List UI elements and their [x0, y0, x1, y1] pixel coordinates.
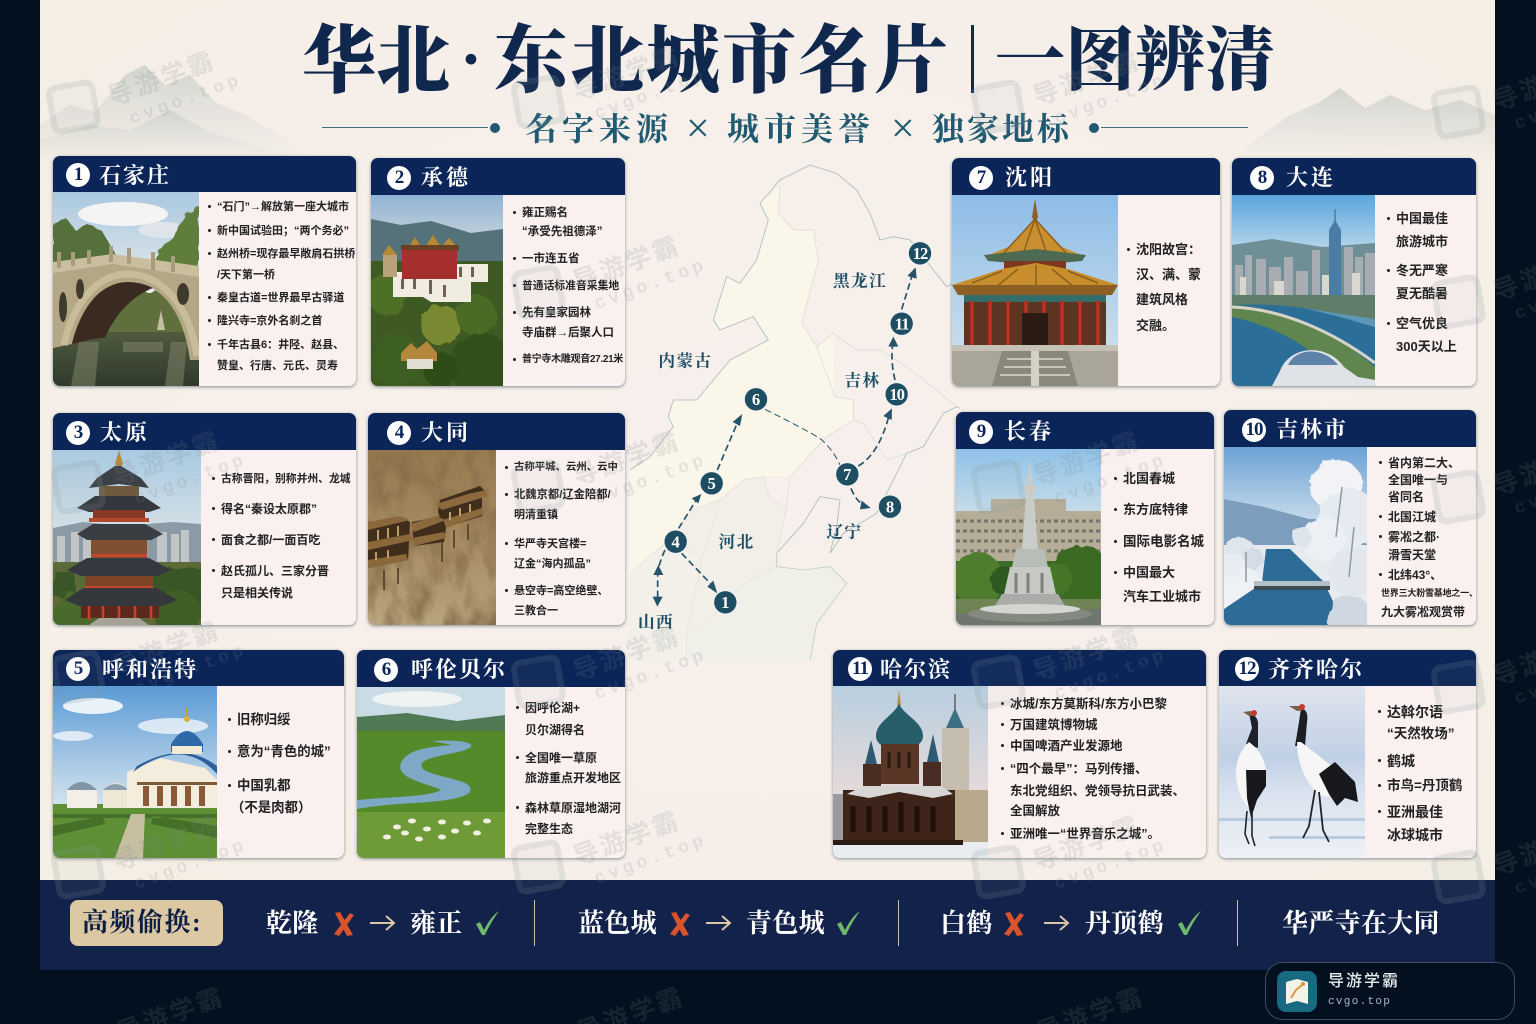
province labels	[638, 272, 887, 632]
province labels: 内蒙古	[658, 351, 712, 371]
text block: 全国解放	[1010, 804, 1060, 818]
high-frequency swap badge	[70, 900, 223, 946]
heading: 哈尔滨	[880, 656, 952, 682]
heading: 2	[395, 166, 403, 188]
text block: 亚洲最佳	[1387, 804, 1443, 820]
card 12: 齐齐哈尔	[1219, 650, 1476, 858]
subtitle: ×	[891, 106, 915, 152]
route nodes: 1	[721, 593, 729, 612]
text block: 旅游重点开发地区	[525, 771, 621, 785]
text block: 旧称归绥	[237, 712, 291, 727]
heading: 7	[977, 166, 985, 188]
province labels: 辽宁	[826, 522, 862, 541]
heading: 吉林市	[1276, 417, 1348, 442]
card 3: 太原	[53, 413, 356, 625]
watermark layer: cvgo.top	[592, 830, 710, 890]
text block: 中国最大	[1123, 565, 1175, 580]
heading: 承德	[421, 165, 471, 190]
text block: 明清重镇	[514, 509, 558, 521]
swap: 蓝色城 to 青色城: 蓝色城	[578, 909, 657, 938]
photo: 双塔楼阁	[53, 450, 201, 625]
swap: 白鹤 to 丹顶鹤	[940, 909, 1201, 938]
text block: 新中国试验田；“两个务必”	[217, 225, 349, 237]
heading: 12	[1238, 658, 1256, 679]
watermark layer: 导游学霸	[110, 427, 225, 491]
watermark layer: cvgo.top	[127, 70, 245, 130]
photo: 丹顶鹤	[1219, 686, 1365, 858]
text block	[513, 206, 624, 365]
watermark layer: cvgo.top	[132, 835, 250, 895]
text block: 滑雪天堂	[1388, 548, 1436, 562]
swap: 乾隆 to 雍正	[266, 909, 499, 938]
text block: 赵氏孤儿、三家分晋	[221, 564, 329, 578]
text block: 中国啤酒产业发源地	[1010, 739, 1123, 753]
text block: 寺庙群→后聚人口	[522, 327, 614, 339]
photo: 喷泉与楼	[956, 449, 1101, 625]
heading	[952, 158, 1220, 195]
text block: 九大雾凇观赏带	[1381, 605, 1465, 619]
watermark layer: cvgo.top	[592, 255, 710, 315]
watermark layer: cvgo.top	[592, 450, 710, 510]
text block: 三教合一	[514, 605, 558, 617]
text block: “天然牧场”	[1387, 726, 1454, 741]
text block: 贝尔湖得名	[525, 723, 585, 737]
card 1: 石家庄	[53, 156, 356, 386]
heading: 呼和浩特	[102, 656, 198, 682]
arrow heads	[653, 267, 917, 607]
swap: 乾隆 to 雍正: 乾隆	[266, 909, 319, 938]
text block: 只是相关传说	[221, 586, 293, 600]
watermark layer: cvgo.top	[132, 450, 250, 510]
text block: 雍正赐名	[522, 207, 568, 219]
text block: 普通话标准音采集地	[522, 280, 619, 292]
text block: （不是肉都）	[231, 800, 311, 815]
photo: 海滨城市	[1232, 195, 1375, 386]
text block: 汉、满、蒙	[1136, 267, 1201, 282]
watermark layer: cvgo.top	[1052, 645, 1170, 705]
heading: 大连	[1286, 165, 1336, 190]
text block: 达斡尔语	[1387, 704, 1443, 720]
text block: 冰城/东方莫斯科/东方小巴黎	[1010, 697, 1167, 711]
swap: 白鹤 to 丹顶鹤: 丹顶鹤	[1085, 909, 1164, 938]
heading	[368, 413, 625, 450]
province labels: 吉林	[844, 370, 880, 390]
heading: 3	[74, 422, 82, 442]
heading	[1219, 650, 1476, 686]
heading	[53, 156, 356, 192]
route arrows	[658, 269, 914, 602]
bottom bar	[40, 880, 1495, 970]
watermark layer: cvgo.top	[1052, 450, 1170, 510]
card 4: 大同	[368, 413, 625, 625]
text block: 冬无严寒	[1396, 263, 1448, 278]
heading: 8	[1258, 166, 1266, 188]
photo: 蒙古风格建筑	[53, 686, 217, 858]
text block: 普宁寺木雕观音27.21米	[522, 354, 623, 365]
text block: 悬空寺=高空绝壁、	[514, 585, 608, 597]
route nodes: 7	[843, 465, 851, 484]
title: 华北	[302, 21, 450, 103]
heading: 10	[1246, 418, 1262, 440]
route nodes: 8	[886, 497, 894, 516]
text block	[1001, 697, 1185, 841]
title: 东北城市名片	[494, 21, 950, 103]
text block: 完整生态	[525, 822, 573, 836]
text block: 国际电影名城	[1123, 534, 1204, 549]
text block: 中国最佳	[1396, 211, 1448, 226]
text block: 鹤城	[1387, 753, 1415, 769]
card 11: 哈尔滨	[833, 650, 1206, 858]
text block: 古称晋阳，别称并州、龙城	[221, 473, 351, 485]
text block: 秦皇古道=世界最早古驿道	[217, 292, 344, 304]
heading	[956, 412, 1214, 449]
province labels: 山西	[638, 613, 674, 632]
heading: 太原	[100, 420, 150, 445]
heading: 11	[852, 658, 868, 679]
text block: 雾凇之都·	[1388, 530, 1440, 544]
text block: 建筑风格	[1136, 292, 1188, 307]
watermark layer: cvgo.top	[592, 645, 710, 705]
watermark layer: 导游学霸	[1030, 812, 1145, 876]
title: ·	[460, 23, 482, 96]
heading: 长春	[1004, 419, 1054, 444]
text block: 面食之都/一面百吃	[221, 533, 320, 547]
watermark layer: 导游学霸	[105, 47, 220, 111]
heading	[371, 158, 625, 195]
text block	[1114, 471, 1204, 604]
title: 一图辨清	[995, 23, 1275, 100]
heading: 9	[977, 420, 985, 442]
watermark layer: 导游学霸	[110, 812, 225, 876]
watermark layer: 导游学霸	[110, 617, 225, 681]
text block	[212, 472, 351, 600]
text block: 旅游城市	[1396, 234, 1448, 249]
heading: 4	[395, 422, 403, 442]
card 7: 沈阳	[952, 158, 1220, 386]
watermark layer: 导游学霸	[1030, 47, 1145, 111]
heading: 齐齐哈尔	[1268, 656, 1364, 682]
text block: 万国建筑博物城	[1010, 718, 1098, 732]
subtitle	[322, 106, 1248, 152]
watermark layer: 导游学霸	[570, 427, 685, 491]
route nodes: 5	[708, 474, 716, 493]
text block: 交融。	[1136, 318, 1175, 333]
swap: 蓝色城 to 青色城	[578, 909, 860, 938]
text block	[516, 701, 621, 836]
heading	[1224, 410, 1476, 447]
route nodes: 12	[913, 244, 928, 263]
brand text	[1328, 972, 1400, 1008]
text block	[1127, 242, 1201, 333]
text block: 古称平城、云州、云中	[514, 462, 618, 473]
text block	[505, 461, 618, 617]
text block: 空气优良	[1396, 316, 1448, 331]
text block: 赵州桥=现存最早敞肩石拱桥	[217, 248, 355, 260]
brand badge	[1265, 962, 1515, 1020]
text block: 北纬43°、	[1388, 568, 1442, 582]
heading	[53, 413, 356, 450]
watermark layer: 导游学霸	[1030, 622, 1145, 686]
map with route	[630, 164, 960, 660]
text block: 市鸟=丹顶鹤	[1387, 778, 1462, 793]
photo: 赵州桥	[53, 192, 199, 386]
watermark layer: 导游学霸	[570, 807, 685, 871]
text block: 北魏京都/辽金陪都/	[514, 489, 611, 501]
text block	[1379, 456, 1476, 619]
card 6: 呼伦贝尔	[357, 650, 625, 858]
subtitle: 名字来源	[525, 111, 673, 147]
photo: 草原河流	[357, 687, 505, 858]
swap: 蓝色城 to 青色城: 青色城	[746, 909, 825, 938]
heading	[53, 650, 344, 686]
text block	[208, 200, 356, 372]
text block: 先有皇家园林	[522, 307, 591, 319]
text block: 森林草原湿地湖河	[525, 801, 621, 815]
subtitle: 城市美誉	[727, 111, 875, 147]
heading: 沈阳	[1005, 165, 1055, 190]
heading: 5	[74, 658, 82, 679]
high-frequency swap badge: 高频偷换:	[82, 908, 202, 937]
photo: 沈阳故宫大政殿	[952, 195, 1118, 386]
photo: 雾凇河景	[1224, 447, 1367, 625]
title	[302, 21, 1275, 103]
watermark layer: 导游学霸	[1030, 427, 1145, 491]
text block: 北国春城	[1123, 471, 1175, 486]
card 5: 呼和浩特	[53, 650, 344, 858]
heading	[357, 650, 625, 687]
heading: 石家庄	[99, 162, 171, 188]
text block: 辽金“海内孤品”	[514, 558, 591, 570]
text block: “四个最早”：马列传播、	[1010, 762, 1148, 776]
watermark layer: cvgo.top	[592, 65, 710, 125]
heading	[1232, 158, 1476, 195]
divider	[534, 900, 535, 946]
photo: 悬空寺	[368, 450, 496, 625]
watermark layer: cvgo.top	[1052, 835, 1170, 895]
text block: 一市连五省	[522, 253, 580, 265]
heading	[833, 650, 1206, 686]
photo: 圣索菲亚教堂	[833, 686, 988, 858]
route nodes	[664, 242, 932, 614]
text block: 千年古县6：井陉、赵县、	[217, 339, 344, 351]
photo: 普陀宗乘	[371, 195, 503, 386]
heading: 6	[382, 658, 390, 680]
subtitle: ×	[686, 106, 710, 152]
text block: 亚洲唯一“世界音乐之城”。	[1010, 827, 1160, 841]
swap: 乾隆 to 雍正: 雍正	[410, 909, 463, 938]
watermark layer: 导游学霸	[570, 232, 685, 296]
note: 华严寺在大同: 华严寺在大同	[1282, 909, 1440, 938]
text block: 中国乳都	[237, 778, 291, 793]
text block: “承受先祖德泽”	[522, 226, 602, 238]
text block: 得名“秦设太原郡”	[221, 502, 317, 516]
province labels: 黑龙江	[833, 272, 887, 291]
text block: 冰球城市	[1387, 827, 1443, 843]
text block: 全国唯一与	[1388, 473, 1448, 487]
heading: 呼伦贝尔	[411, 657, 507, 682]
text block: 意为“青色的城”	[237, 744, 331, 759]
watermark layer: 导游学霸	[570, 42, 685, 106]
subtitle: 独家地标	[932, 111, 1072, 147]
text block: 华严寺天宫楼=	[514, 538, 586, 550]
route nodes: 11	[895, 314, 909, 333]
text block: 东北党组织、党领导抗日武装、	[1010, 784, 1185, 798]
route nodes: 10	[889, 385, 905, 404]
watermark layer: cvgo.top	[132, 640, 250, 700]
swap: 白鹤 to 丹顶鹤: 白鹤	[940, 909, 993, 938]
route nodes: 6	[752, 390, 760, 409]
text block: 赞皇、行唐、元氏、灵寿	[217, 360, 338, 372]
ink mountains backdrop	[40, 65, 1495, 152]
text block	[1387, 211, 1457, 354]
province labels: 河北	[719, 532, 755, 551]
text block: 省内第二大、	[1388, 456, 1460, 470]
heading: 1	[74, 164, 82, 185]
card 8: 大连	[1232, 158, 1476, 386]
text block: 隆兴寺=京外名刹之首	[217, 315, 322, 327]
text block: /天下第一桥	[217, 269, 275, 281]
text block	[228, 712, 331, 815]
card 10: 吉林市	[1224, 410, 1476, 625]
text block: 300天以上	[1396, 339, 1457, 354]
text block: 全国唯一草原	[525, 751, 597, 765]
text block: 沈阳故宫：	[1136, 242, 1201, 257]
divider	[898, 900, 899, 946]
text block: 北国江城	[1388, 510, 1436, 524]
text block: 夏无酷暑	[1396, 286, 1448, 301]
brand text: 导游学霸	[1328, 973, 1400, 990]
text block: 省同名	[1388, 490, 1424, 504]
watermark layer: cvgo.top	[1052, 70, 1170, 130]
card 9: 长春	[956, 412, 1214, 625]
text block	[1378, 704, 1462, 843]
heading: 大同	[421, 420, 471, 445]
route nodes: 4	[672, 532, 681, 551]
text block: 因呼伦湖+	[525, 701, 580, 715]
province shapes	[630, 165, 960, 660]
text block: “石门”→解放第一座大城市	[217, 201, 349, 213]
watermark layer: 导游学霸	[570, 622, 685, 686]
divider	[1237, 900, 1238, 946]
text block: 世界三大粉雪基地之一、	[1381, 588, 1476, 598]
text block: 汽车工业城市	[1123, 589, 1201, 604]
icon: logo	[1277, 971, 1317, 1012]
brand text: cvgo.top	[1328, 996, 1391, 1008]
text block: 东方底特律	[1123, 502, 1188, 517]
card 2: 承德	[371, 158, 625, 386]
